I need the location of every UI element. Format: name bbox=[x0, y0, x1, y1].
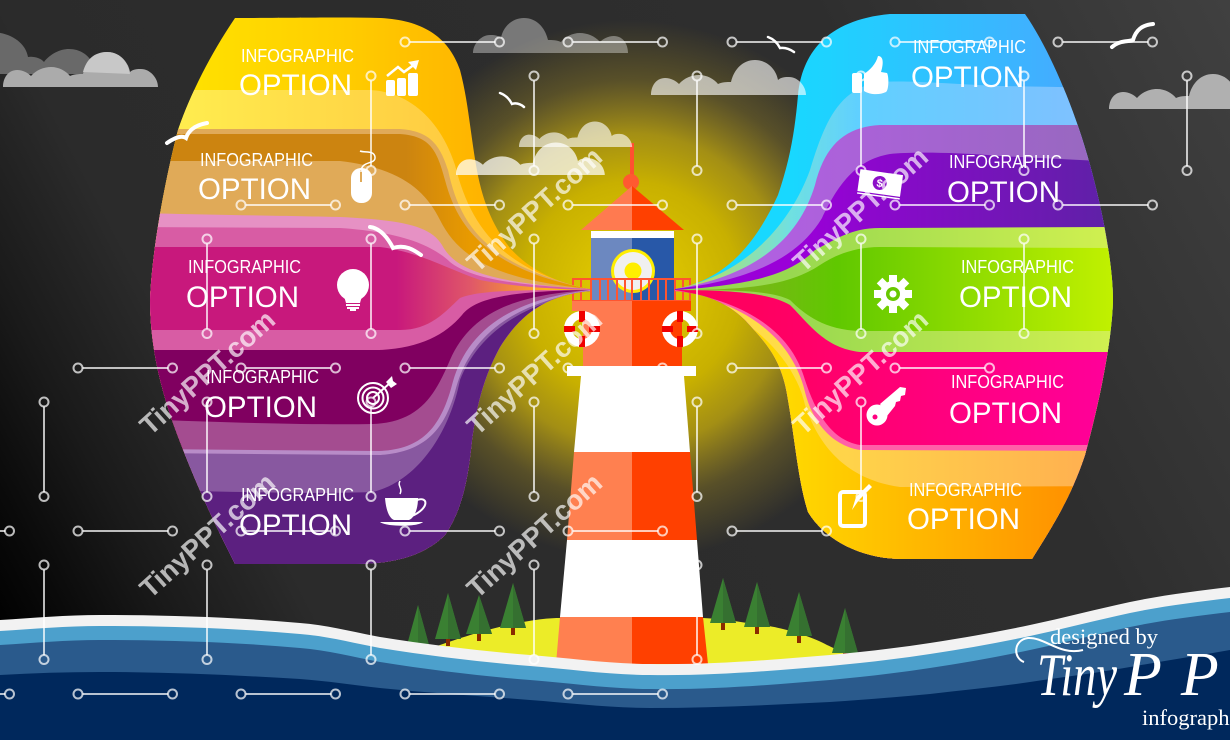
birds bbox=[167, 24, 1153, 255]
watermarks: TinyPPT.com bbox=[461, 467, 608, 604]
text: right options: OPTION bbox=[947, 176, 1060, 209]
logo: designed by Tiny PPT infographic: designed by bbox=[1050, 624, 1158, 649]
icon: gear bbox=[874, 275, 912, 313]
trees bbox=[407, 578, 858, 658]
watermarks: TinyPPT.com bbox=[787, 304, 934, 441]
tower stripes bbox=[556, 376, 708, 664]
text: right options: OPTION bbox=[907, 503, 1020, 536]
watermarks bbox=[134, 141, 934, 604]
watermarks: TinyPPT.com bbox=[134, 304, 281, 441]
watermarks: TinyPPT.com bbox=[787, 141, 934, 278]
text: left options: OPTION bbox=[186, 281, 299, 314]
text: left options: OPTION bbox=[204, 391, 317, 424]
text: right options: OPTION bbox=[959, 281, 1072, 314]
lantern room bbox=[591, 231, 674, 301]
icon: bar chart with arrow bbox=[386, 60, 419, 96]
text: right options: OPTION bbox=[949, 397, 1062, 430]
text: left options: OPTION bbox=[239, 509, 352, 542]
icon: tablet and pencil bbox=[840, 484, 872, 526]
railing bbox=[573, 279, 690, 301]
sea waves bbox=[0, 587, 1230, 740]
text: left options: INFOGRAPHIC bbox=[200, 150, 313, 170]
text: right options bbox=[907, 37, 1074, 536]
text: left options: INFOGRAPHIC bbox=[241, 485, 354, 505]
icon: key bbox=[866, 387, 906, 426]
island bbox=[405, 618, 860, 680]
text: left options: INFOGRAPHIC bbox=[241, 46, 354, 66]
text: left options: INFOGRAPHIC bbox=[206, 367, 319, 387]
icon: light bulb bbox=[337, 269, 369, 311]
clouds bbox=[0, 18, 1230, 175]
logo: designed by Tiny PPT infographic bbox=[1016, 624, 1230, 730]
text: right options: INFOGRAPHIC bbox=[913, 37, 1026, 57]
icon: money stack bbox=[857, 169, 903, 199]
text: right options: INFOGRAPHIC bbox=[961, 257, 1074, 277]
gallery deck bbox=[567, 366, 696, 376]
logo: designed by Tiny PPT infographic: Tiny bbox=[1037, 642, 1117, 708]
icon: computer mouse bbox=[351, 151, 375, 203]
gallery body bbox=[572, 301, 691, 366]
text: left options: OPTION bbox=[239, 69, 352, 102]
panel: right ribbons bbox=[675, 14, 1113, 559]
panel: left ribbons bbox=[150, 18, 590, 564]
text: right options: INFOGRAPHIC bbox=[909, 480, 1022, 500]
spire and ball bbox=[623, 143, 639, 190]
icon: thumbs up bbox=[852, 56, 888, 94]
watermarks: TinyPPT.com bbox=[461, 304, 608, 441]
lighthouse glow bbox=[362, 20, 902, 560]
icon: target with dart bbox=[358, 376, 397, 413]
text: left options bbox=[186, 46, 354, 542]
icon: money stack: $ bbox=[876, 178, 883, 190]
lifebuoy left bbox=[564, 311, 600, 347]
lighthouse bbox=[556, 143, 708, 664]
text: right options: INFOGRAPHIC bbox=[951, 372, 1064, 392]
text: right options: OPTION bbox=[911, 61, 1024, 94]
watermarks: TinyPPT.com bbox=[461, 141, 608, 278]
lifebuoy right bbox=[662, 311, 698, 347]
text: left options: INFOGRAPHIC bbox=[188, 257, 301, 277]
text: left options: OPTION bbox=[198, 173, 311, 206]
icon: coffee cup bbox=[380, 481, 425, 526]
text: right options: INFOGRAPHIC bbox=[949, 152, 1062, 172]
roof bbox=[581, 186, 684, 230]
watermarks: TinyPPT.com bbox=[134, 467, 281, 604]
